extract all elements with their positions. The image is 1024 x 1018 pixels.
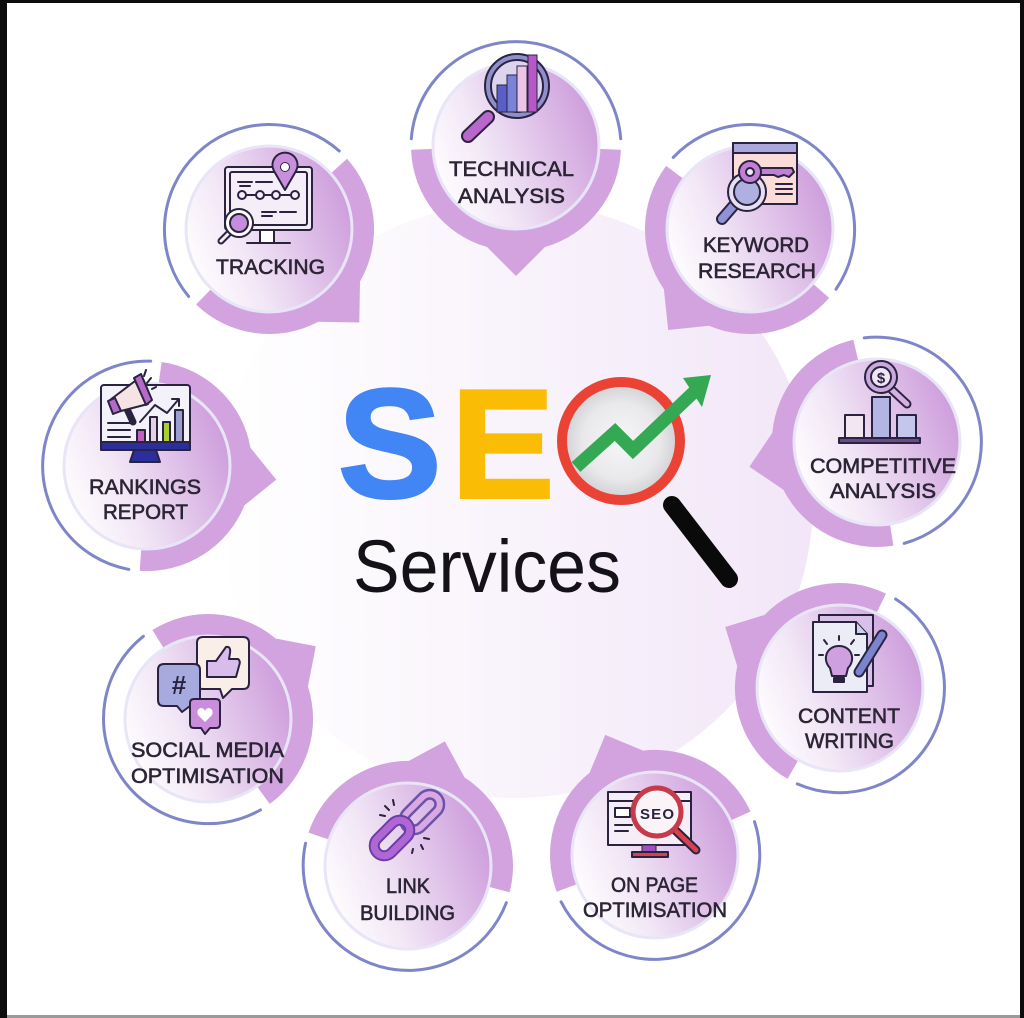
outer ring xyxy=(32,351,151,569)
disc xyxy=(757,605,923,771)
icon: SEO magnifier on monitor xyxy=(608,788,696,857)
letter S: S xyxy=(338,357,441,530)
outer ring xyxy=(797,599,981,829)
disc xyxy=(64,383,230,549)
pointer band xyxy=(508,695,751,893)
disc xyxy=(186,146,352,312)
growth arrow xyxy=(576,375,711,467)
magnifier handle xyxy=(672,505,729,579)
letter E: E xyxy=(451,358,554,530)
panel: competitive analysis xyxy=(729,319,999,570)
icon: social bubbles xyxy=(158,637,249,734)
label: COMPETITIVE xyxy=(810,455,956,478)
icon: monitor with megaphone and chart xyxy=(101,370,190,462)
label: ON PAGE xyxy=(611,874,698,897)
label: WRITING xyxy=(805,730,894,753)
icon: dollar magnifier and bars: $ xyxy=(877,370,886,387)
pointer band xyxy=(729,340,894,570)
label: OPTIMISATION xyxy=(583,899,727,922)
label: ANALYSIS xyxy=(830,480,936,503)
label: OPTIMISATION xyxy=(131,765,284,788)
disc xyxy=(572,772,738,938)
magnifier O xyxy=(562,382,680,500)
icon: SEO magnifier on monitor: SEO xyxy=(640,806,674,823)
pointer band xyxy=(676,534,887,779)
pointer band xyxy=(152,559,374,804)
icon: monitor with pin and magnifier xyxy=(221,153,312,243)
label: CONTENT xyxy=(798,705,900,728)
icon: chain link xyxy=(370,790,444,860)
icon: social bubbles: # xyxy=(172,670,187,700)
pointer band xyxy=(139,362,287,584)
panel: link building xyxy=(278,712,546,996)
icon: key and magnifier xyxy=(722,143,797,219)
background circle xyxy=(217,202,813,798)
label: REPORT xyxy=(103,501,188,524)
disc xyxy=(667,146,833,312)
title: SEO Services xyxy=(338,357,729,608)
icon: magnifier with bars xyxy=(468,54,549,136)
panel: technical analysis xyxy=(411,42,621,276)
panel: tracking xyxy=(121,81,435,395)
panel: on page optimisation xyxy=(508,695,792,991)
label: RANKINGS xyxy=(89,476,201,499)
label: LINK xyxy=(386,875,430,898)
disc xyxy=(325,783,491,949)
label: ANALYSIS xyxy=(458,185,565,208)
panel: social media optimisation xyxy=(63,559,374,864)
outer ring xyxy=(411,42,621,139)
outer ring xyxy=(121,81,339,296)
panel: rankings report xyxy=(32,351,287,584)
outer ring xyxy=(63,636,260,864)
disc xyxy=(794,359,960,525)
outer ring xyxy=(278,843,506,996)
pointer band xyxy=(195,158,435,395)
panel: keyword research xyxy=(587,82,897,396)
label: BUILDING xyxy=(360,902,455,925)
label: KEYWORD xyxy=(703,234,809,257)
disc xyxy=(433,63,599,229)
panel: content writing xyxy=(676,534,981,829)
pointer band xyxy=(308,712,546,893)
pointer band xyxy=(587,165,830,396)
pointer band xyxy=(411,149,621,276)
label: TECHNICAL xyxy=(449,158,574,181)
outer ring xyxy=(864,319,999,543)
icon: dollar magnifier and bars xyxy=(839,361,920,443)
outer ring xyxy=(561,822,792,991)
outer ring xyxy=(673,82,897,289)
word Services: Services xyxy=(353,525,621,608)
label: SOCIAL MEDIA xyxy=(131,739,284,762)
label: RESEARCH xyxy=(698,260,816,283)
label: TRACKING xyxy=(216,256,325,279)
icon: document, bulb and pencil xyxy=(813,615,882,692)
disc xyxy=(125,636,291,802)
